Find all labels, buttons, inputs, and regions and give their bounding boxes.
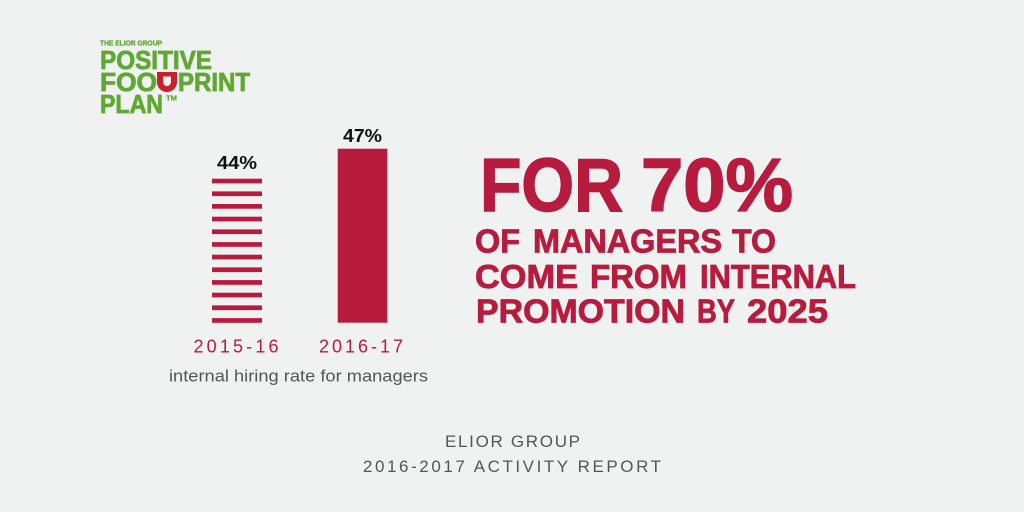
icon: red shield letter D — [157, 72, 177, 92]
value label 2016-17: 47% — [343, 126, 382, 146]
logo trademark: TM — [166, 94, 177, 102]
footer source — [363, 432, 661, 476]
subhead line 1: MANAGERS — [533, 222, 722, 259]
subhead line 1: TO — [732, 222, 776, 259]
subhead line 2 — [475, 258, 856, 295]
subhead line 2: COME — [475, 258, 578, 295]
logo line: foo: FOO — [100, 67, 157, 97]
headline: for 70% — [480, 143, 793, 227]
logo: Positive Foodprint Plan — [100, 40, 250, 119]
subhead line 1: OF — [475, 222, 520, 259]
striped bar 2015-16 — [212, 179, 262, 323]
headline: for 70%: 70% — [641, 143, 793, 227]
axis label 2015-16: 2015-16 — [194, 337, 278, 357]
solid bar 2016-17 — [338, 149, 387, 323]
subhead line 3 — [476, 293, 828, 330]
footer line 1: ELIOR GROUP — [445, 432, 580, 451]
headline block — [475, 143, 856, 330]
logo tagline: THE ELIOR GROUP — [100, 40, 162, 48]
subhead line 3: PROMOTION — [476, 293, 685, 330]
logo line: print: PRINT — [178, 67, 250, 97]
footer line 2: 2016-2017 ACTIVITY REPORT — [363, 457, 661, 476]
logo line: positive: POSITIVE — [100, 45, 212, 75]
bar chart: internal hiring rate for managers — [169, 126, 428, 386]
logo line: plan: PLAN — [100, 89, 163, 119]
subhead line 3: 2025 — [747, 293, 828, 330]
subhead line 2: FROM — [590, 258, 687, 295]
headline: for 70%: FOR — [480, 143, 623, 227]
value label 2015-16: 44% — [217, 153, 257, 173]
axis label 2016-17: 2016-17 — [319, 337, 403, 357]
subhead line 3: BY — [697, 293, 735, 330]
subhead line 2: INTERNAL — [700, 258, 856, 295]
chart caption: internal hiring rate for managers — [169, 367, 428, 386]
subhead line 1 — [475, 222, 776, 259]
